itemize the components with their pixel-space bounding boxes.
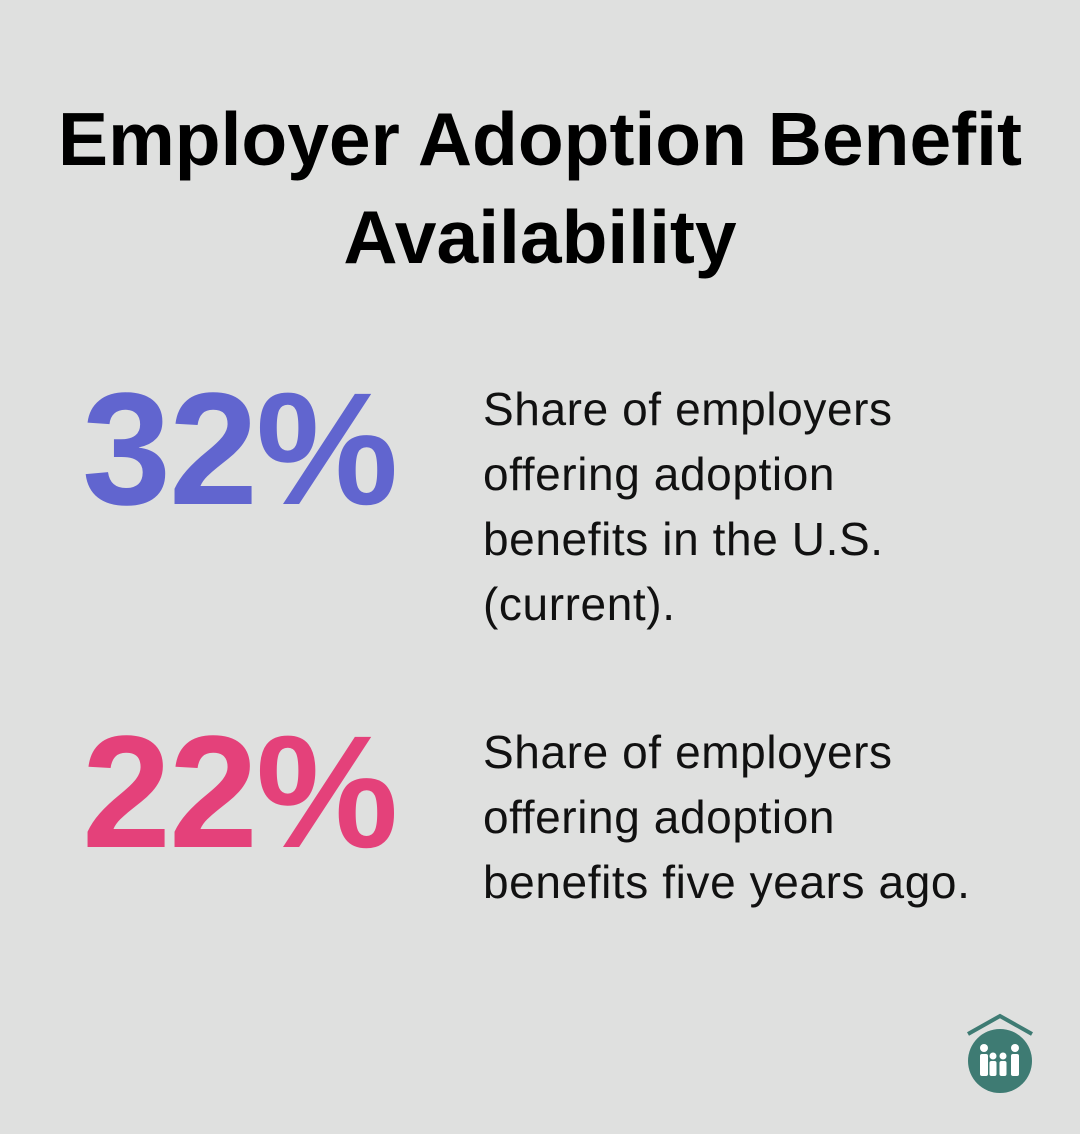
text: 32% description: offering adoption bbox=[483, 448, 835, 500]
title bbox=[58, 97, 1022, 279]
stat: 32%: 32% bbox=[82, 359, 396, 538]
text: 22% description: benefits five years ago. bbox=[483, 856, 970, 908]
text: 32% description bbox=[483, 383, 893, 630]
text: 22% description: offering adoption bbox=[483, 791, 835, 843]
title: Employer Adoption Benefit bbox=[58, 97, 1022, 181]
text: 32% description: (current). bbox=[483, 578, 676, 630]
text: 22% description: Share of employers bbox=[483, 726, 893, 778]
title: Availability bbox=[343, 195, 737, 279]
stat: 22%: 22% bbox=[82, 702, 396, 881]
text: 22% description bbox=[483, 726, 970, 908]
icon: logo bbox=[967, 1014, 1033, 1093]
text: 32% description: Share of employers bbox=[483, 383, 893, 435]
text: 32% description: benefits in the U.S. bbox=[483, 513, 884, 565]
